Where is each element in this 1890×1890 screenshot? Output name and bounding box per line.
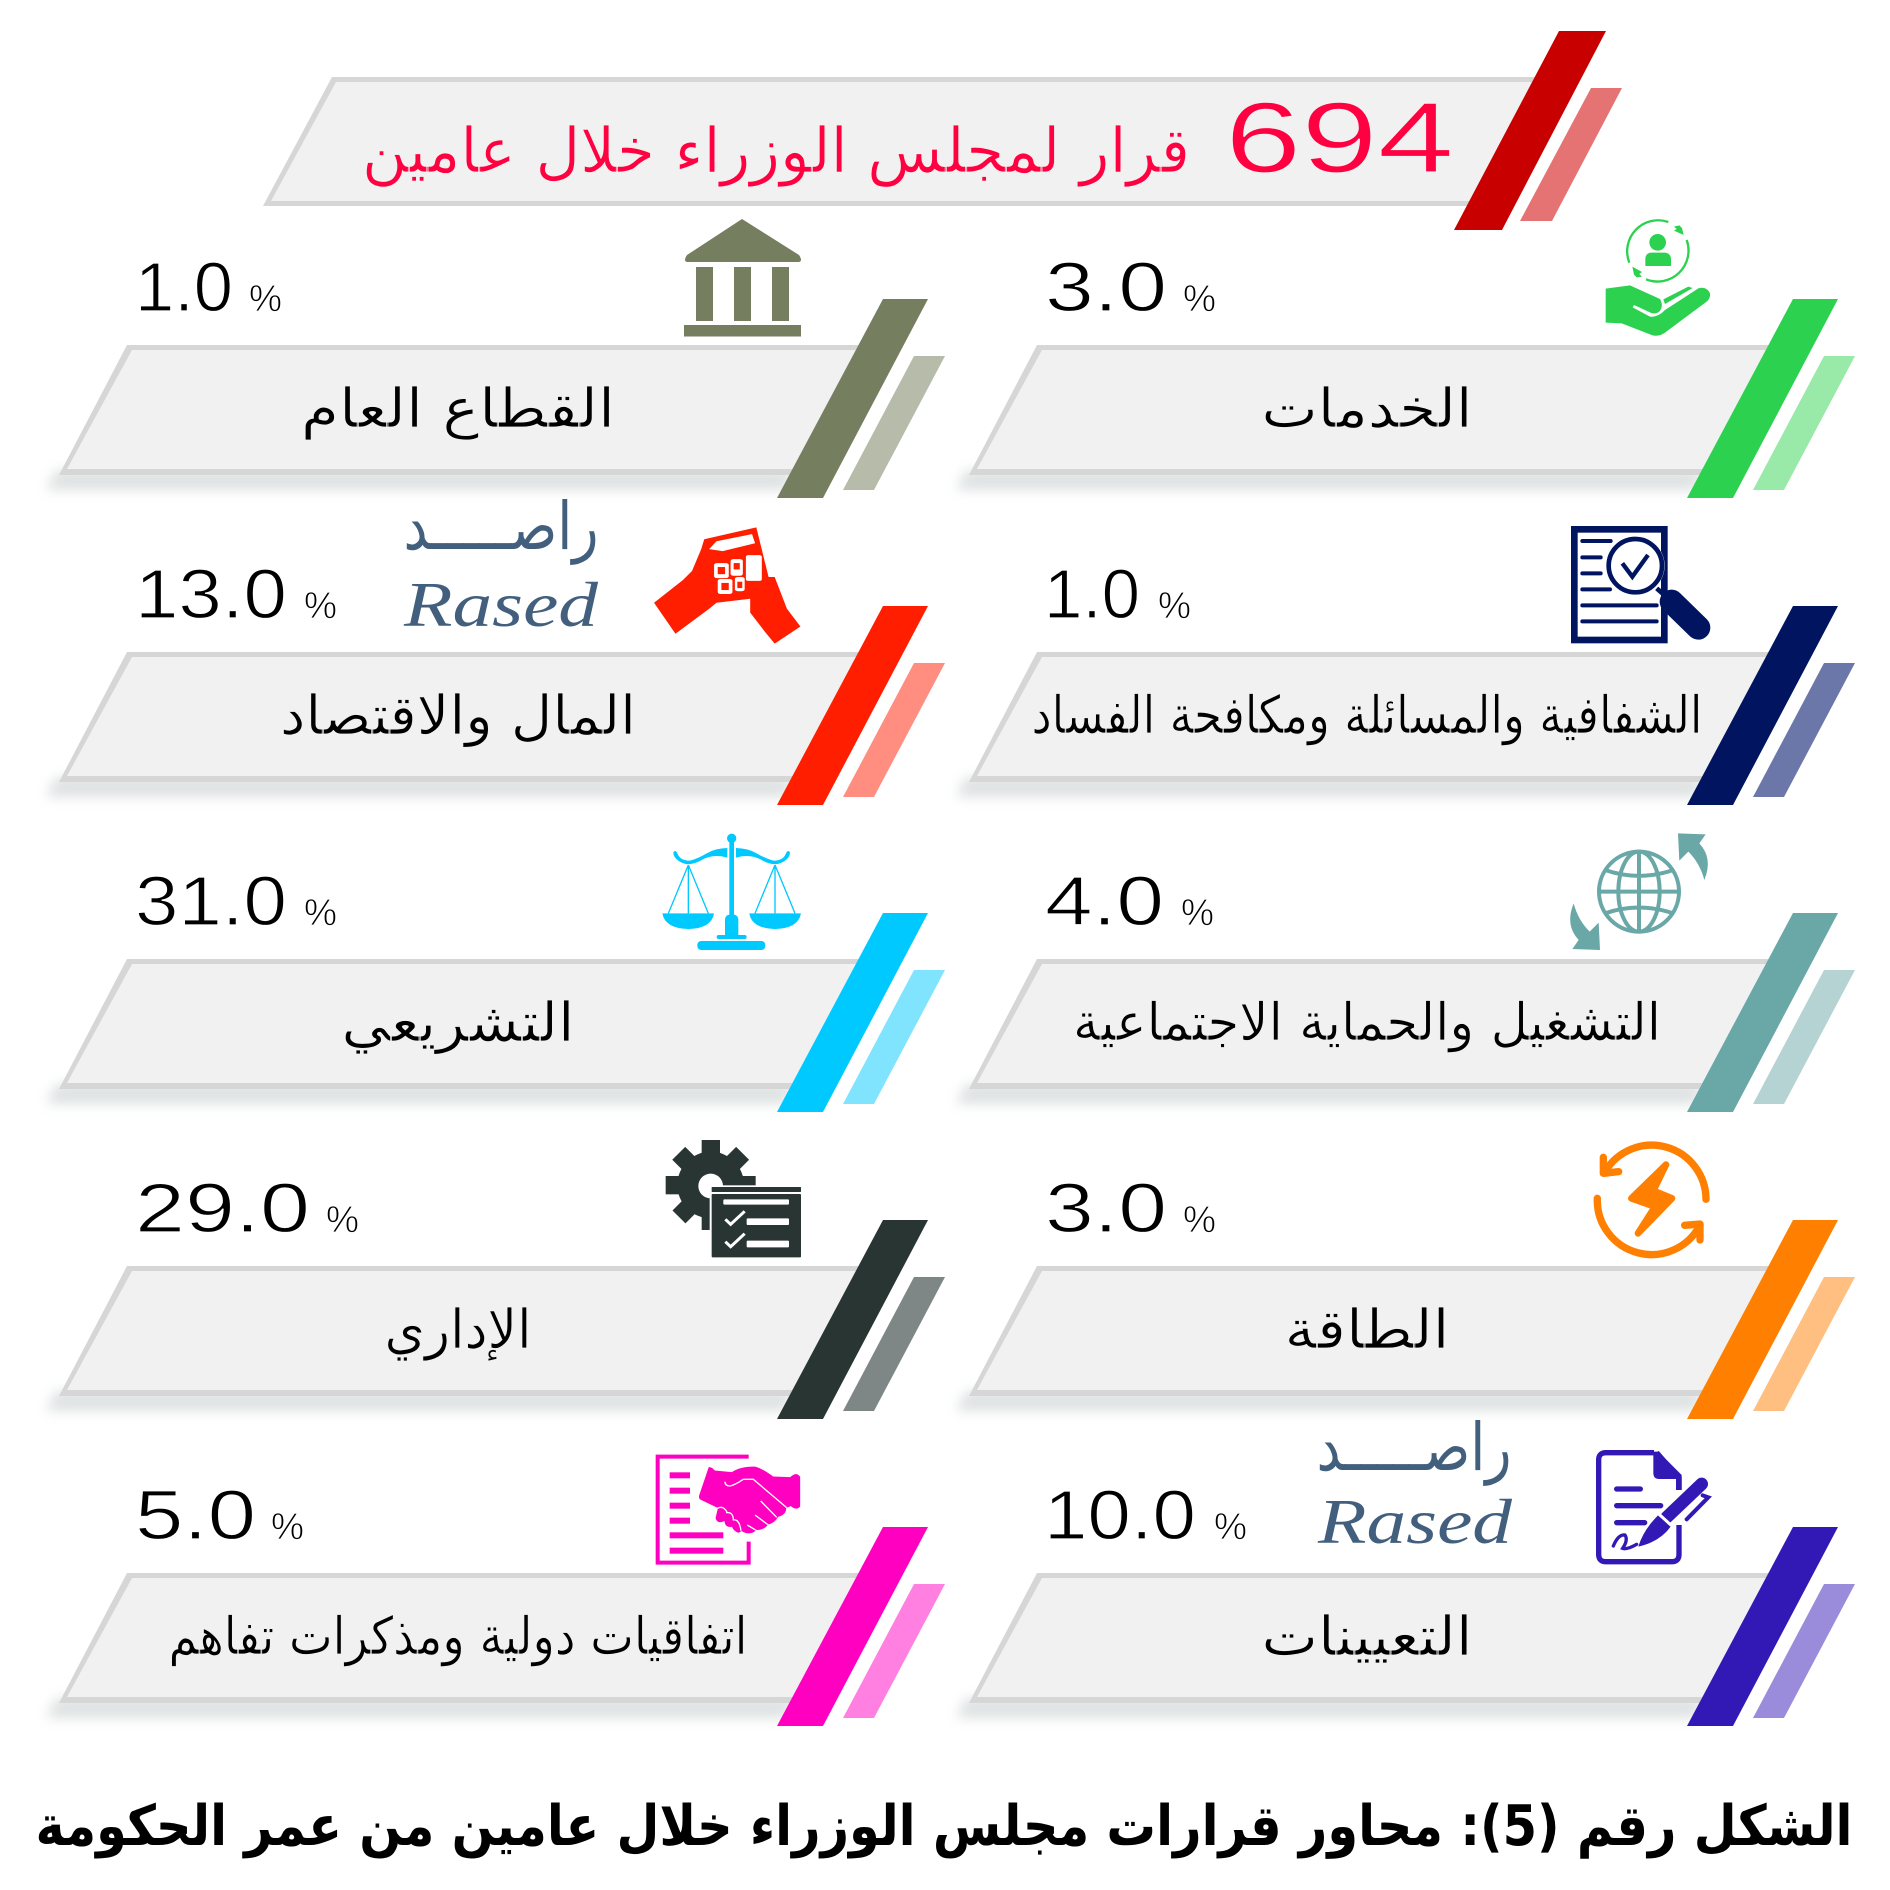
accent bars xyxy=(1687,1527,1855,1726)
accent bars xyxy=(777,606,945,805)
label: اتفاقيات دولية ومذكرات تفاهم xyxy=(168,1607,748,1667)
banner: 694 decisions xyxy=(263,31,1622,230)
value xyxy=(1045,1169,1216,1247)
accent bars xyxy=(1687,913,1855,1112)
value: 3.0 xyxy=(1045,248,1167,326)
card: finance and economy xyxy=(46,488,945,805)
logo: Rased: Rased xyxy=(403,569,599,640)
caption: figure title: الشكل رقم (5): محاور قرارات مجلس الوزراء خلال عامين من عمر الحكومة xyxy=(36,1794,1852,1859)
value: 1.0 xyxy=(135,248,233,326)
label: التشريعي xyxy=(342,991,574,1054)
value xyxy=(135,862,337,940)
value: % xyxy=(304,892,337,934)
accent bars xyxy=(777,1527,945,1726)
banner accent bar xyxy=(1454,31,1606,230)
logo: Rased: راصـــــد xyxy=(1316,1409,1512,1486)
banner number: 694 xyxy=(1225,82,1454,194)
label: الإداري xyxy=(384,1298,532,1361)
value: % xyxy=(326,1199,359,1241)
card: transparency and anti-corruption xyxy=(956,529,1855,805)
value: % xyxy=(1181,892,1214,934)
icon: bank xyxy=(684,219,801,336)
value: % xyxy=(249,278,282,320)
value: % xyxy=(271,1506,304,1548)
accent bars xyxy=(1687,299,1855,498)
value: 13.0 xyxy=(135,555,287,633)
label: التشغيل والحماية الاجتماعية xyxy=(1073,993,1661,1053)
banner light accent bar xyxy=(1520,88,1622,221)
logo: Rased xyxy=(1316,1409,1513,1557)
card: legislative xyxy=(46,834,945,1112)
label: المال والاقتصاد xyxy=(280,684,636,747)
value: % xyxy=(1183,278,1216,320)
value xyxy=(135,1476,304,1554)
icon: document and pen xyxy=(1599,1452,1708,1562)
value: 29.0 xyxy=(135,1169,310,1247)
value xyxy=(1044,555,1191,633)
value xyxy=(135,1169,359,1247)
accent bars xyxy=(777,913,945,1112)
label: الخدمات xyxy=(1262,377,1472,440)
label: الطاقة xyxy=(1284,1298,1450,1361)
icon: globe with arrows xyxy=(1570,833,1708,950)
logo: Rased: راصـــــد xyxy=(404,488,598,565)
icon: handshake and document xyxy=(658,1457,801,1563)
icon: gear and checklist xyxy=(666,1140,806,1260)
icon: hands with calculator xyxy=(654,527,800,644)
value xyxy=(1044,1476,1247,1554)
value: % xyxy=(1214,1506,1247,1548)
value xyxy=(135,555,337,633)
card: international agreements and MoUs xyxy=(46,1457,945,1726)
value: 5.0 xyxy=(135,1476,256,1554)
value xyxy=(135,248,282,326)
accent bars xyxy=(777,299,945,498)
accent bars xyxy=(1687,606,1855,805)
icon: energy bolt with cycle arrows xyxy=(1597,1145,1706,1255)
value: 3.0 xyxy=(1045,1169,1167,1247)
card: administrative xyxy=(46,1140,945,1419)
value: 31.0 xyxy=(135,862,287,940)
label: الشفافية والمسائلة ومكافحة الفساد xyxy=(1032,686,1702,746)
icon: scales of justice xyxy=(662,834,801,950)
icon: document and magnifier xyxy=(1574,529,1698,640)
value: 4.0 xyxy=(1045,862,1164,940)
value: % xyxy=(304,585,337,627)
accent bars xyxy=(777,1220,945,1419)
value xyxy=(1045,248,1216,326)
accent bars xyxy=(1687,1220,1855,1419)
value: % xyxy=(1158,585,1191,627)
logo: Rased xyxy=(403,488,599,640)
value: 10.0 xyxy=(1044,1476,1196,1554)
label: التعيينات xyxy=(1262,1605,1472,1668)
label: القطاع العام xyxy=(301,377,615,440)
card: public sector xyxy=(46,219,945,498)
value: % xyxy=(1183,1199,1216,1241)
icon: hand with person xyxy=(1606,220,1710,336)
card: employment and social protection xyxy=(956,833,1855,1112)
logo: Rased: Rased xyxy=(1317,1486,1513,1557)
card: energy xyxy=(956,1145,1855,1419)
card: appointments xyxy=(956,1409,1855,1726)
value xyxy=(1045,862,1214,940)
value: 1.0 xyxy=(1044,555,1140,633)
card: services xyxy=(956,220,1855,498)
banner heading: قرار لمجلس الوزراء خلال عامين xyxy=(362,114,1190,187)
